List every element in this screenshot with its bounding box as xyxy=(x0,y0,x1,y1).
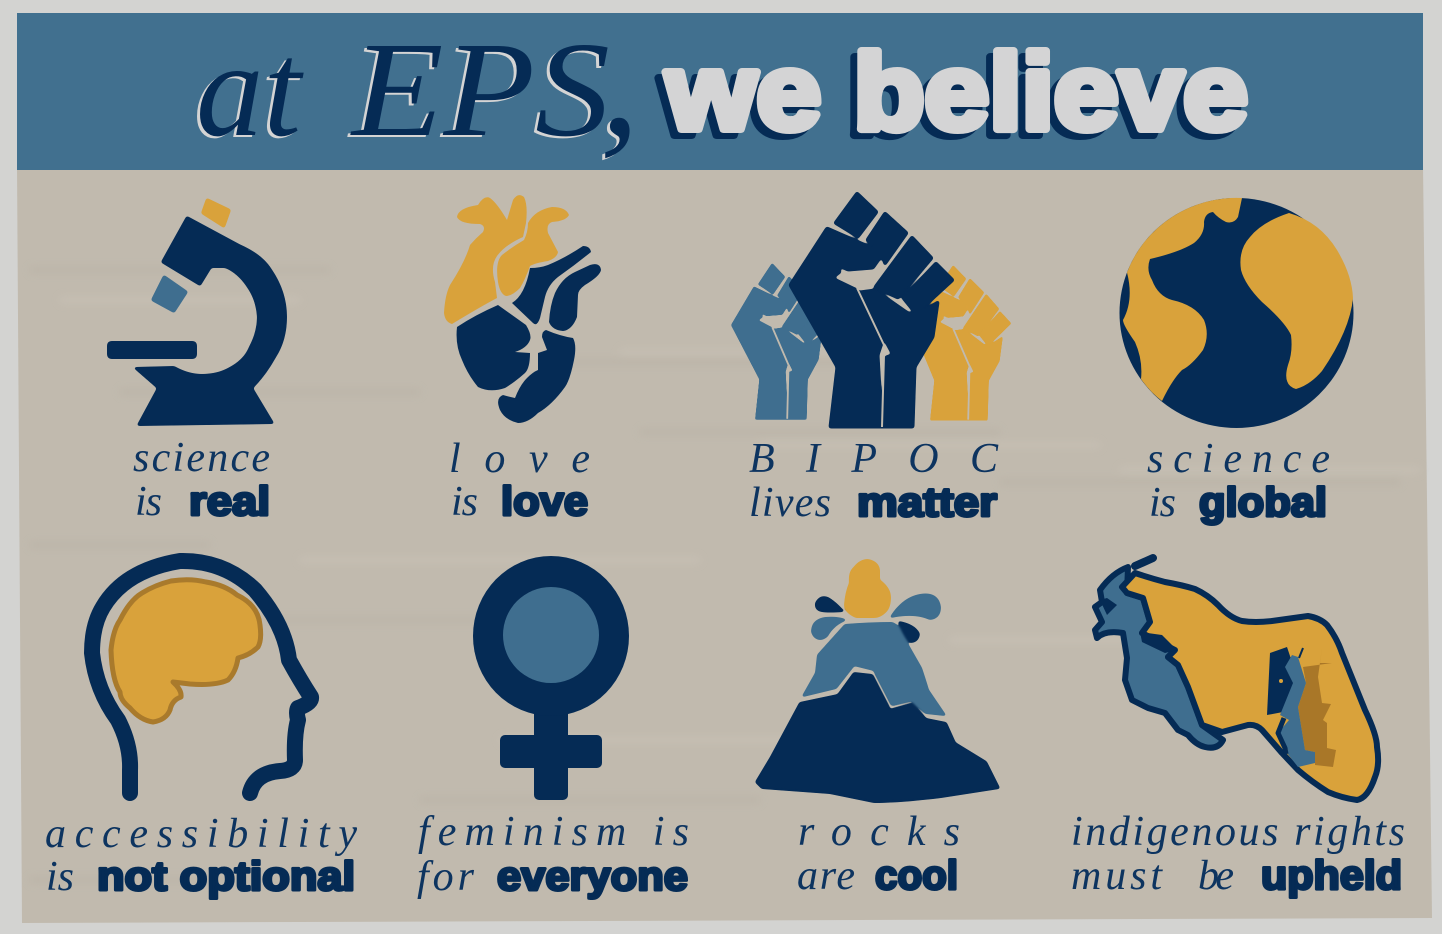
caption: feminism is for everyone: everyone xyxy=(497,853,688,899)
icon: volcano xyxy=(756,560,999,802)
title: at EPS,: , xyxy=(597,0,636,171)
caption: science is real: science xyxy=(133,435,270,481)
caption: science is global xyxy=(1147,436,1330,526)
caption: accessibility is not optional: is xyxy=(46,854,74,900)
caption: accessibility is not optional: not optional xyxy=(97,853,355,899)
caption: science is real: is xyxy=(135,479,162,525)
caption: science is global: global xyxy=(1199,479,1327,525)
caption: science is real xyxy=(133,435,270,525)
caption: indigenous rights must be upheld: must xyxy=(1071,853,1163,899)
caption: feminism is for everyone: for xyxy=(417,854,475,900)
caption: science is real: real xyxy=(189,478,270,524)
caption: accessibility is not optional xyxy=(45,811,357,900)
icon: globe xyxy=(1120,198,1354,428)
icon: raised fists xyxy=(732,193,1010,427)
title: we believe: we believe xyxy=(658,37,1241,158)
caption: BIPOC lives matter: BIPOC xyxy=(749,436,999,482)
caption: indigenous rights must be upheld: be xyxy=(1198,853,1234,899)
caption: rocks are cool: are xyxy=(797,853,855,899)
title: at EPS,: EPS xyxy=(347,17,607,167)
caption: science is global: is xyxy=(1149,480,1176,526)
caption: love is love xyxy=(449,436,590,525)
caption: rocks are cool: cool xyxy=(875,852,958,898)
title: we believe: we believe xyxy=(665,31,1248,152)
panel: BIPOC lives matter xyxy=(732,193,1010,526)
icon: anatomical heart xyxy=(444,195,601,423)
caption: feminism is for everyone: feminism is xyxy=(418,809,689,855)
panel: accessibility is not optional xyxy=(45,561,357,900)
icon: head with brain xyxy=(92,561,311,793)
caption: indigenous rights must be upheld: upheld xyxy=(1261,852,1402,898)
caption: science is global: science xyxy=(1147,436,1330,482)
fist: blue xyxy=(732,264,829,419)
panel: science is global xyxy=(1120,198,1354,526)
panel: rocks are cool xyxy=(756,560,999,899)
caption: love is love: love xyxy=(501,478,588,524)
caption: BIPOC lives matter: lives xyxy=(749,480,831,526)
panel: indigenous rights must be upheld xyxy=(1071,558,1405,899)
caption: feminism is for everyone xyxy=(417,809,689,900)
title: at EPS,: at xyxy=(196,15,304,165)
panel: love is love xyxy=(444,195,601,525)
caption: rocks are cool xyxy=(797,809,960,899)
panel: science is real xyxy=(107,199,286,525)
caption: rocks are cool: rocks xyxy=(798,809,960,855)
icon: territory map xyxy=(1095,558,1378,800)
caption: indigenous rights must be upheld: indigenous rights xyxy=(1071,809,1405,855)
caption: love is love: love xyxy=(449,436,590,482)
icon: female symbol xyxy=(473,556,629,800)
title: at EPS, xyxy=(193,0,640,171)
title: at EPS,: at xyxy=(193,17,301,167)
caption: accessibility is not optional: accessibility xyxy=(45,811,357,857)
panel: feminism is for everyone xyxy=(417,556,689,900)
icon: microscope xyxy=(107,199,286,425)
caption: indigenous rights must be upheld xyxy=(1071,809,1405,899)
caption: BIPOC lives matter xyxy=(749,436,999,526)
background panel xyxy=(17,165,1432,923)
title: at EPS,: EPS xyxy=(350,15,610,165)
fist: navy xyxy=(790,193,953,427)
caption: BIPOC lives matter: matter xyxy=(857,479,997,525)
caption: love is love: is xyxy=(451,479,478,525)
fist: gold xyxy=(913,266,1010,420)
title banner xyxy=(17,0,1423,171)
